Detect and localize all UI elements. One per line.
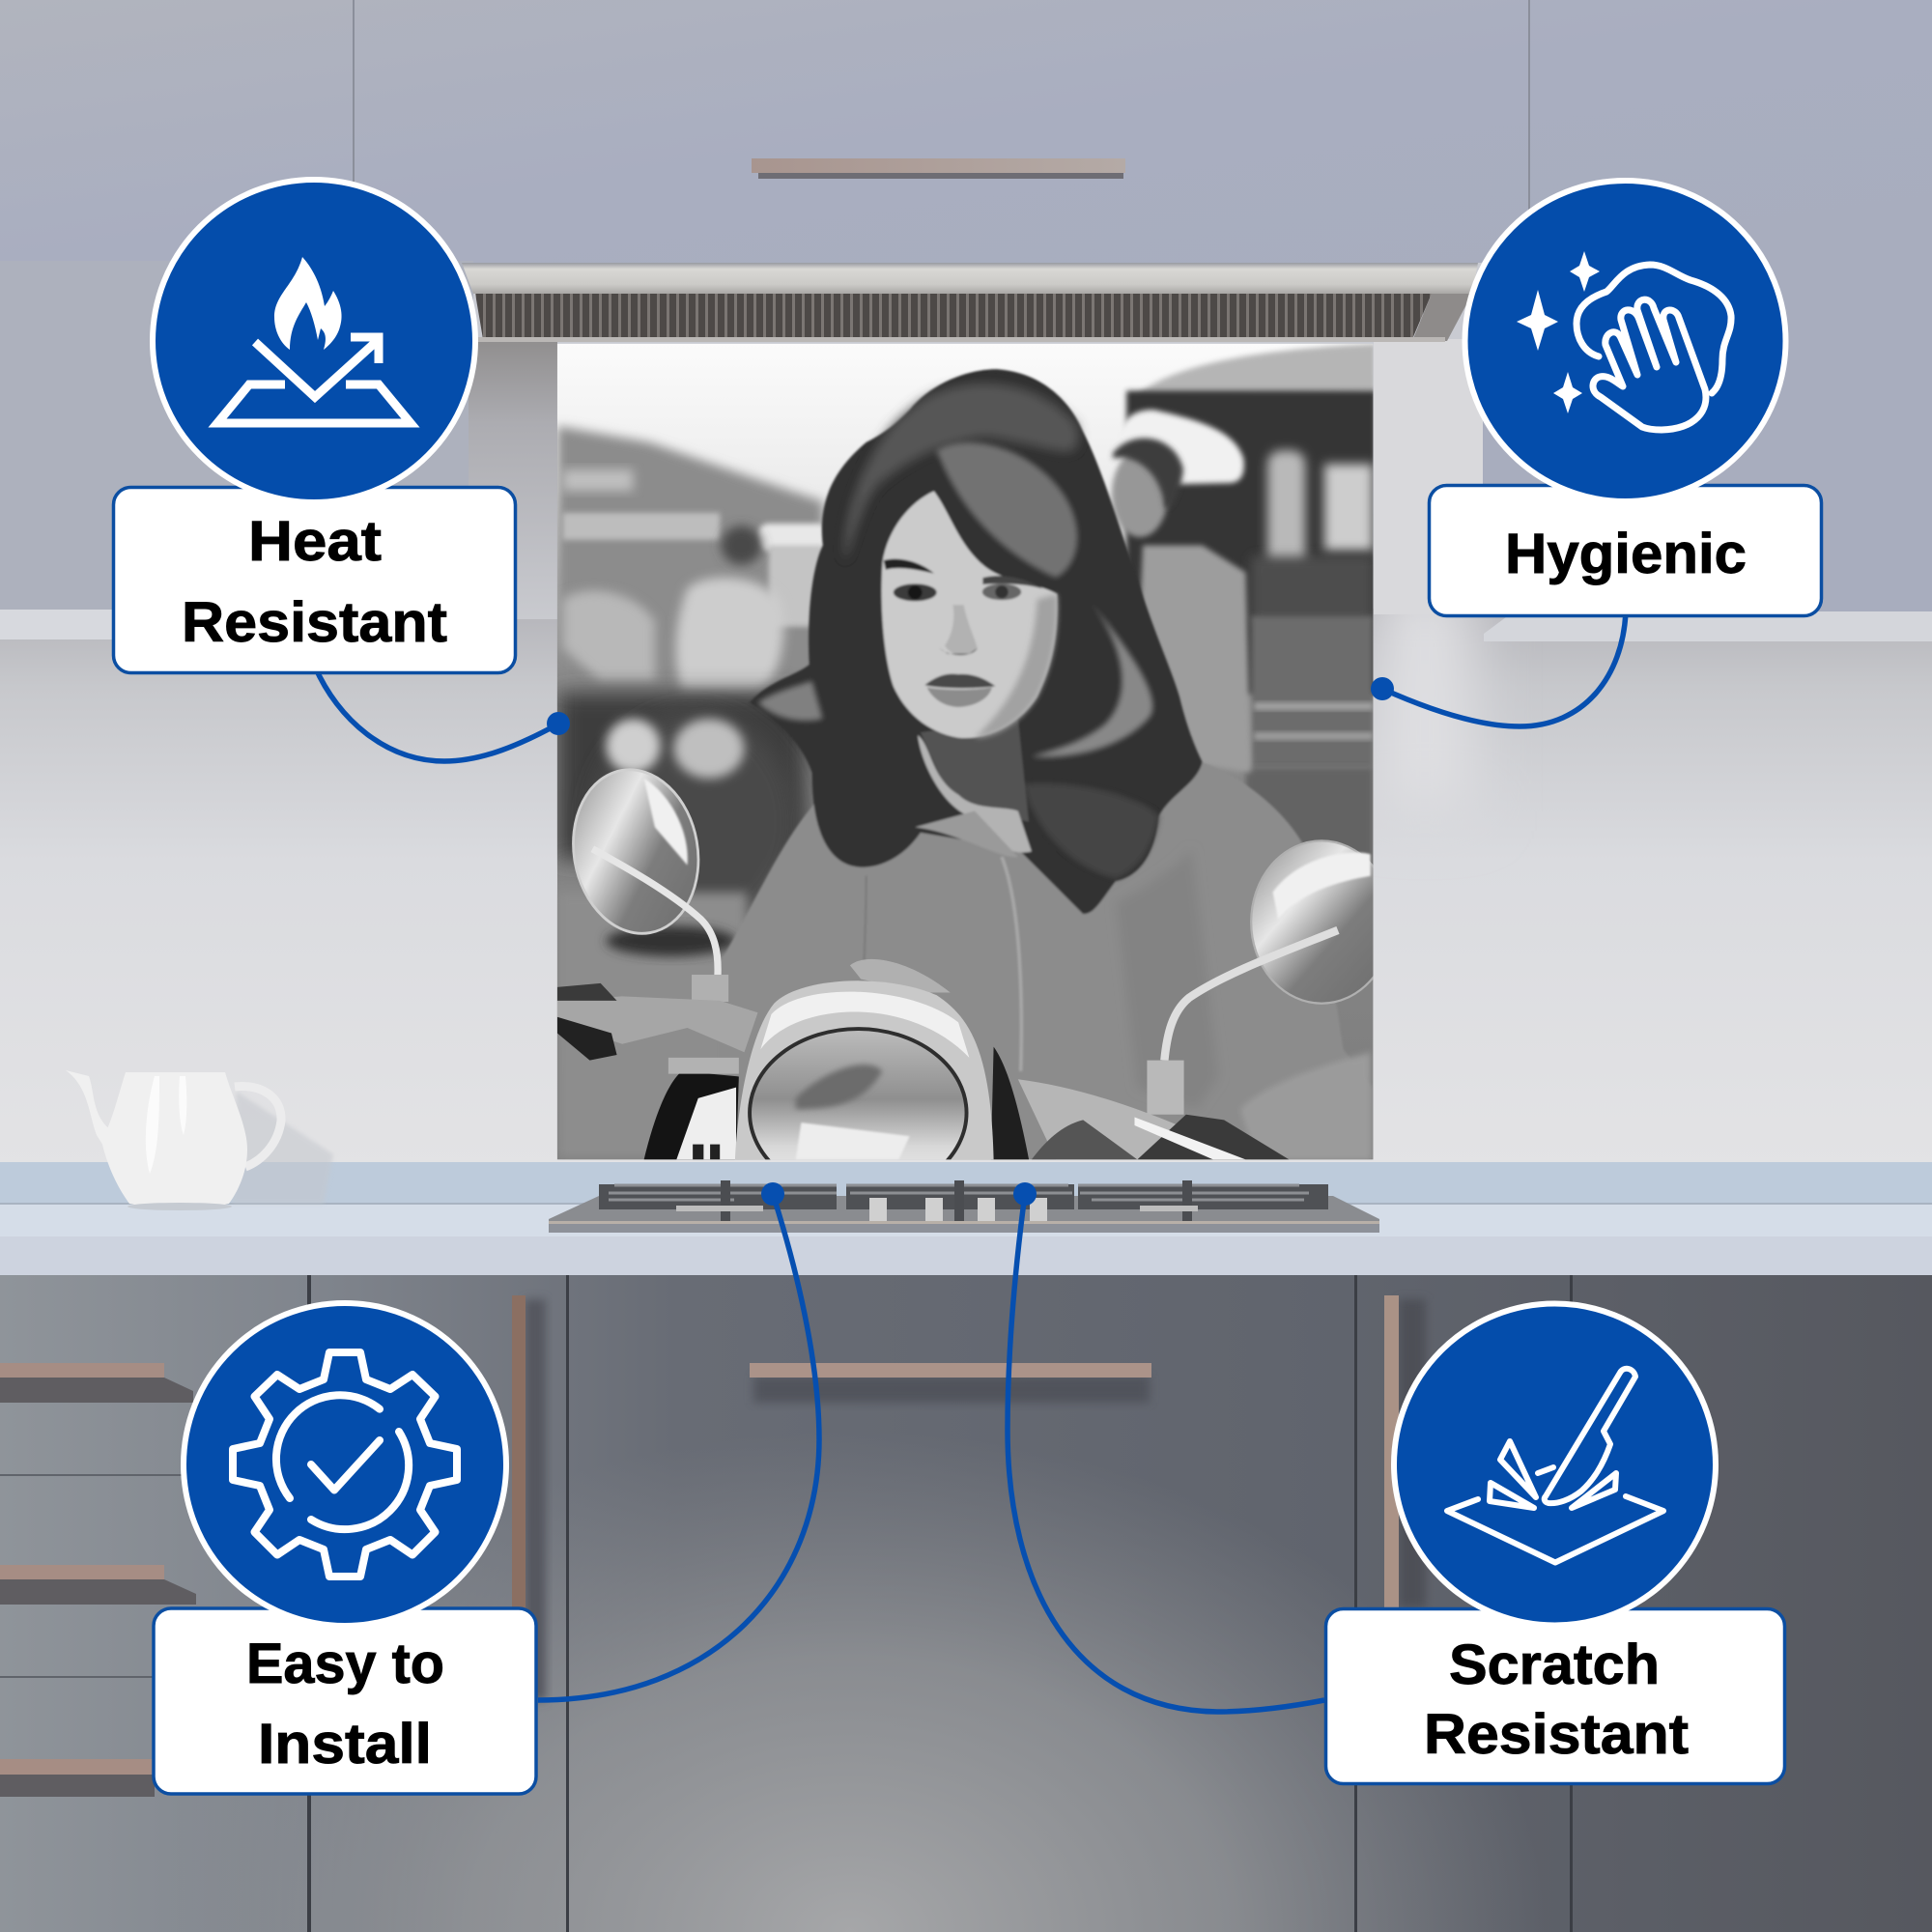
right mirror — [1147, 840, 1392, 1115]
badge circle — [1394, 1304, 1716, 1625]
heading: easy to install: Install — [258, 1713, 432, 1776]
teapot shadow — [232, 1092, 333, 1204]
bus — [1116, 344, 1376, 876]
label box — [1430, 485, 1822, 616]
heading: hygienic: Hygienic — [1505, 523, 1747, 585]
callout: hygienic — [1430, 181, 1822, 616]
extractor hood — [462, 263, 1478, 342]
photo background — [557, 344, 1376, 1159]
connector: hygienic — [1371, 611, 1626, 726]
counter upstand — [0, 1162, 1932, 1205]
label box — [154, 1608, 536, 1794]
facial features — [884, 559, 1042, 707]
callout: easy to install — [154, 1303, 536, 1794]
heading: easy to install: Easy to — [246, 1633, 444, 1695]
upper cabinet handle — [752, 158, 1125, 179]
heading: scratch resistant: Scratch — [1449, 1634, 1660, 1696]
badge circle — [1464, 181, 1785, 501]
icon: hand wiping with sparkles — [1517, 251, 1731, 430]
cooktop — [549, 1180, 1379, 1233]
badge circle — [153, 180, 475, 502]
heading: heat resistant: Resistant — [182, 591, 447, 654]
badge circle — [184, 1303, 506, 1626]
label box — [114, 487, 516, 672]
wall recess beside panel — [469, 339, 557, 619]
wall glow beside panel — [1377, 580, 1473, 811]
icon: flame over surface with deflected arrow — [217, 257, 411, 423]
icon: gear with check mark — [233, 1352, 457, 1577]
callout: scratch resistant — [1325, 1304, 1785, 1783]
heading: scratch resistant: Resistant — [1424, 1703, 1689, 1766]
worktop — [0, 1203, 1932, 1275]
man in background — [1112, 439, 1251, 773]
left mirror — [560, 759, 728, 1002]
hair back — [750, 369, 1203, 914]
wall right of panel — [1374, 339, 1483, 614]
icon: knife scratching surface — [1447, 1369, 1663, 1563]
heading: heat resistant: Heat — [248, 510, 382, 573]
neck and collar — [921, 719, 1029, 822]
coat — [720, 762, 1373, 1159]
panel: black and white photo splashback — [557, 344, 1392, 1197]
face — [882, 491, 1058, 738]
label box — [1325, 1609, 1785, 1783]
callout: heat resistant — [114, 180, 516, 672]
connector: heat resistant — [315, 667, 570, 761]
handlebars and headlight — [556, 958, 1289, 1159]
upper cabinets — [0, 0, 1932, 641]
woman — [720, 369, 1373, 1159]
wall — [0, 609, 1932, 1169]
teapot — [66, 1070, 281, 1210]
connector: easy to install — [538, 1182, 819, 1700]
cabinet handles — [0, 1295, 1426, 1797]
base cabinets — [0, 1275, 1932, 1932]
connector: scratch resistant — [1008, 1182, 1324, 1712]
